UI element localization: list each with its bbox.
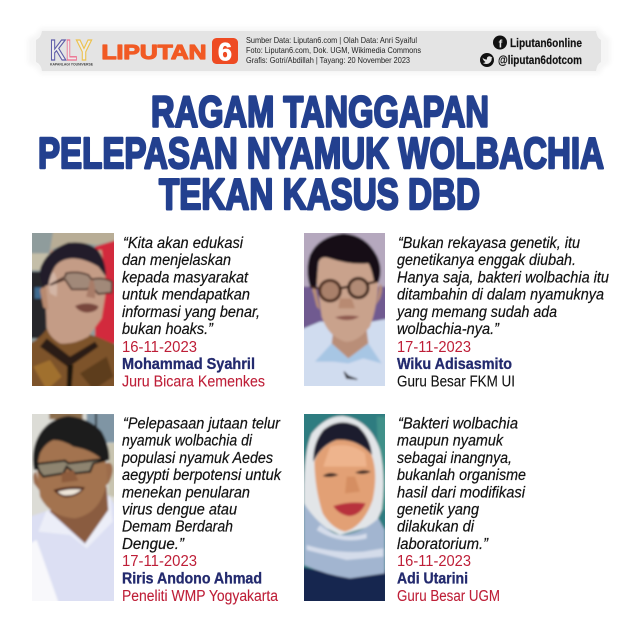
quote: Mohammad Syahril: bukan hoaks.”: [122, 321, 214, 338]
photo: Adi Utarini: [304, 414, 385, 601]
logo: KLY: [50, 35, 94, 67]
quote: Adi Utarini: sebagai inangnya,: [397, 450, 512, 467]
quote: Mohammad Syahril: [122, 235, 260, 338]
title: [38, 88, 604, 219]
source credits: Sumber Data: Liputan6.com | Olah Data: Anri Syaiful: [246, 35, 417, 45]
social: facebook: [493, 36, 582, 50]
photo: Riris Andono Ahmad: [32, 414, 114, 601]
source credits: Foto: Liputan6.com, Dok. UGM, Wikimedia Commons: [246, 45, 421, 55]
logo: Liputan6: LIPUTAN: [102, 42, 206, 64]
role: Juru Bicara Kemenkes: [122, 374, 265, 390]
date: 16-11-2023: [122, 339, 197, 356]
role: Peneliti WMP Yogyakarta: [122, 588, 278, 605]
quote: Wiku Adisasmito: yang memang sudah ada: [396, 304, 557, 321]
panel: Mohammad Syahril: [30, 230, 265, 390]
quote: Adi Utarini: bukanlah organisme: [397, 467, 526, 484]
quote: Riris Andono Ahmad: “Pelepasaan jutaan telur: [123, 416, 281, 432]
panel: Riris Andono Ahmad: [30, 410, 282, 607]
quote: Wiku Adisasmito: Hanya saja, bakteri wolbachia itu: [397, 269, 609, 286]
date: 17-11-2023: [397, 339, 471, 356]
quote: Mohammad Syahril: “Kita akan edukasi: [123, 235, 244, 252]
logo: Liputan6: [102, 38, 238, 66]
title: TEKAN KASUS DBD: [159, 170, 480, 219]
logo: KLY: K: [50, 35, 66, 67]
quote: Riris Andono Ahmad: populasi nyamuk Aedes: [121, 450, 273, 467]
photo: Mohammad Syahril: [32, 233, 114, 386]
quote: Wiku Adisasmito: [396, 235, 609, 338]
source credits: [246, 35, 421, 65]
logo: KLY: KAPANLAGI YOUNIVERSE: [50, 62, 94, 66]
date: 17-11-2023: [122, 553, 197, 570]
date: 16-11-2023: [397, 553, 471, 570]
source credits: Grafis: Gotri/Abdillah | Tayang: 20 November 2023: [246, 55, 410, 65]
quote: Wiku Adisasmito: “Bukan rekayasa genetik, itu: [398, 235, 580, 252]
quote: Mohammad Syahril: dan menjelaskan: [122, 252, 231, 269]
quote: Mohammad Syahril: kepada masyarakat: [122, 269, 249, 286]
quote: Adi Utarini: “Bakteri wolbachia: [398, 416, 518, 432]
name: Adi Utarini: [397, 570, 468, 588]
social: twitter: @liputan6dotcom: [498, 55, 582, 67]
title: RAGAM TANGGAPAN: [151, 88, 489, 136]
quote: Riris Andono Ahmad: aegypti berpotensi untuk: [122, 467, 282, 484]
social: facebook: f: [499, 38, 503, 50]
quote: Wiku Adisasmito: wolbachia-nya.”: [397, 321, 500, 338]
role: Guru Besar UGM: [397, 588, 500, 605]
quote: Riris Andono Ahmad: nyamuk wolbachia di: [122, 433, 252, 450]
panel: Adi Utarini: [300, 410, 526, 607]
photo: Wiku Adisasmito: [304, 233, 385, 386]
social: twitter: [480, 53, 582, 67]
header band: [28, 28, 610, 74]
quote: Riris Andono Ahmad: [121, 416, 282, 553]
quote: Adi Utarini: genetik yang: [397, 502, 479, 518]
name: Riris Andono Ahmad: [122, 570, 262, 588]
name: Wiku Adisasmito: [397, 356, 512, 373]
panel: Wiku Adisasmito: [300, 230, 609, 390]
social: facebook: Liputan6online: [510, 38, 582, 50]
logo: KLY: L: [66, 35, 77, 67]
quote: Adi Utarini: laboratorium.”: [397, 536, 489, 553]
quote: Adi Utarini: maupun nyamuk: [397, 433, 504, 450]
quote: Wiku Adisasmito: ditambahin di dalam nyamuknya: [397, 287, 604, 304]
logo: KLY: Y: [76, 35, 92, 67]
quote: Adi Utarini: dilakukan di: [397, 519, 475, 536]
quote: Mohammad Syahril: untuk mendapatkan: [122, 287, 250, 304]
role: Guru Besar FKM UI: [397, 374, 515, 390]
quote: Riris Andono Ahmad: Demam Berdarah: [122, 519, 233, 536]
quote: Adi Utarini: [397, 416, 526, 553]
name: Mohammad Syahril: [122, 356, 255, 373]
quote: Riris Andono Ahmad: Dengue.”: [122, 536, 185, 553]
quote: Adi Utarini: hasil dari modifikasi: [397, 484, 526, 501]
quote: Riris Andono Ahmad: menekan penularan: [122, 484, 250, 501]
quote: Riris Andono Ahmad: virus dengue atau: [122, 502, 237, 518]
quote: Wiku Adisasmito: genetikanya enggak diubah.: [397, 252, 576, 269]
quote: Mohammad Syahril: informasi yang benar,: [122, 304, 260, 321]
logo: Liputan6: 6: [218, 38, 232, 66]
